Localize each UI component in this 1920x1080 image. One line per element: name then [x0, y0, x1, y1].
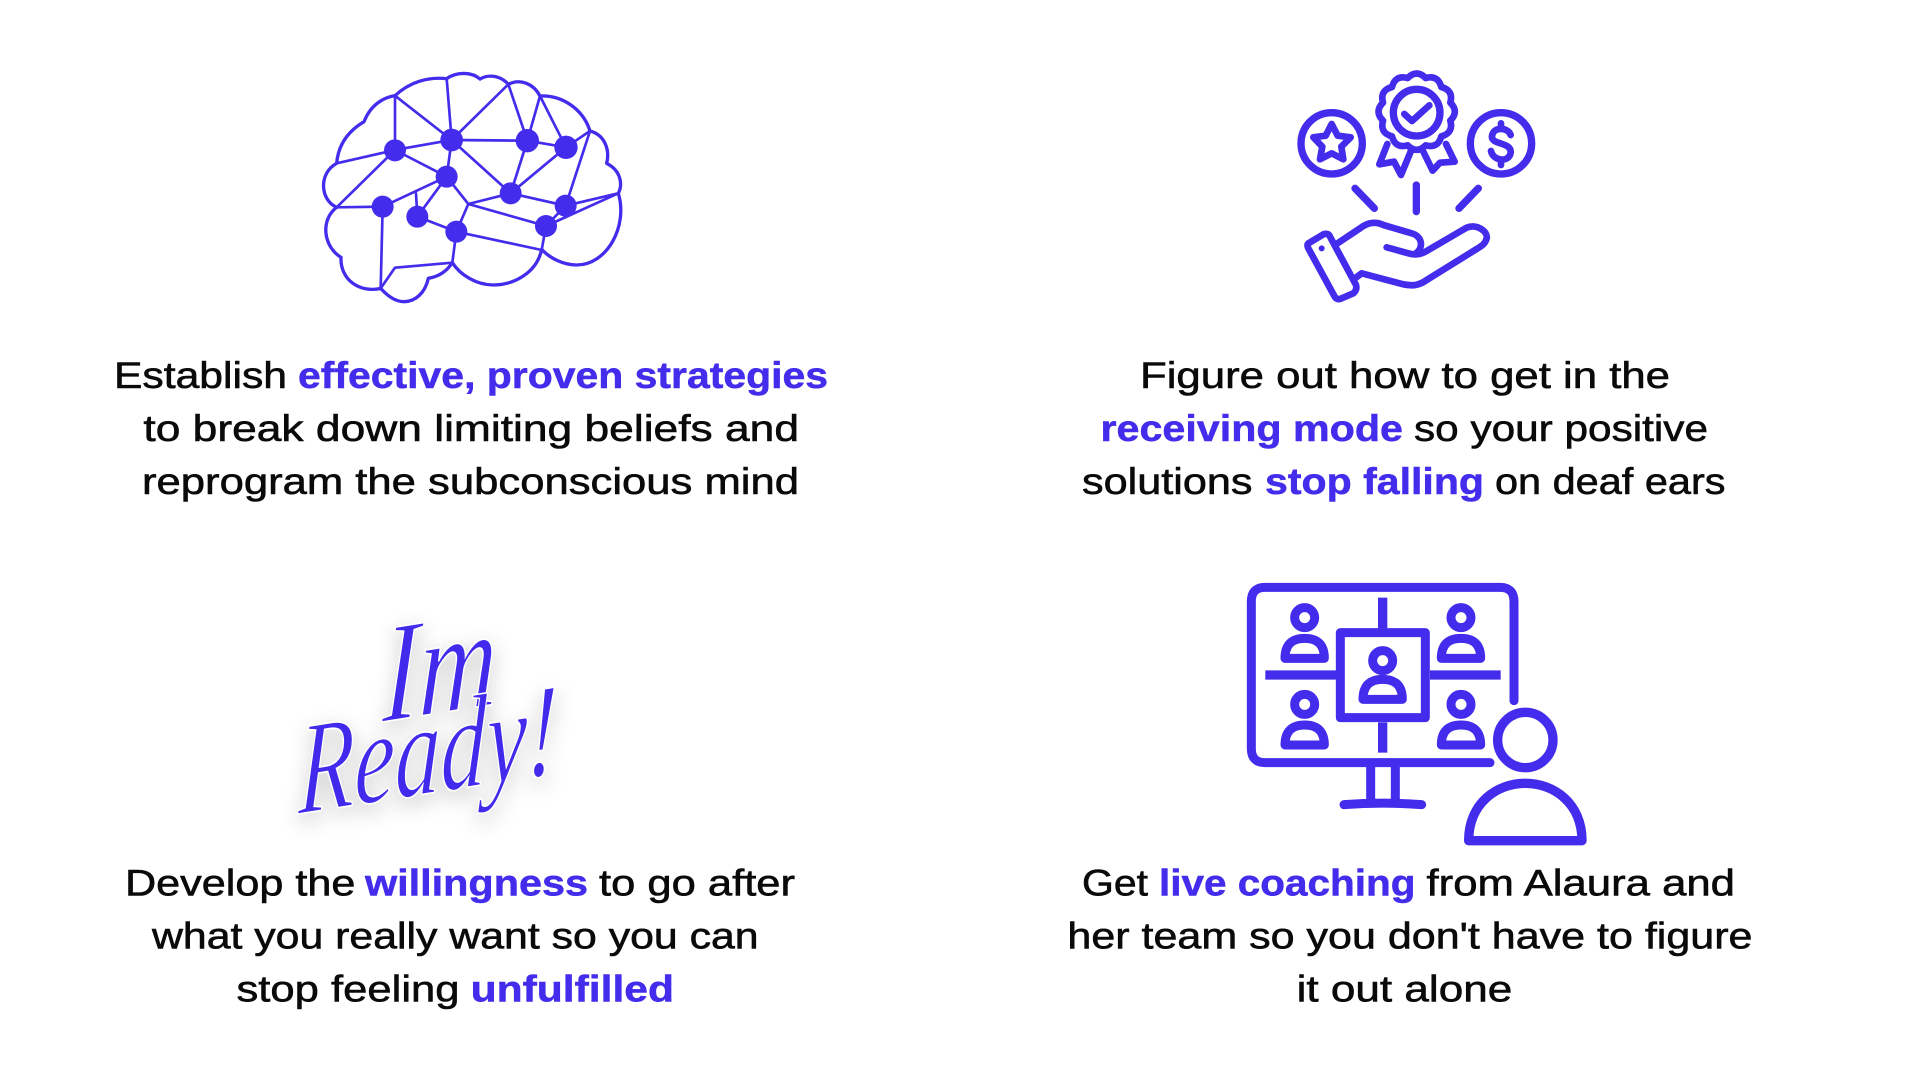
text: strategies copy: reprogram the subconscious mind [142, 461, 799, 502]
text: receiving mode copy: stop falling [1265, 461, 1484, 502]
text: strategies copy: Establish [114, 355, 287, 396]
text: receiving mode copy: so your positive [1414, 408, 1708, 449]
text: live coaching copy [1067, 862, 1752, 1010]
text: willingness copy: what you really want so you can [151, 916, 759, 956]
text: willingness copy [125, 862, 795, 1010]
text: live coaching copy: Get [1082, 862, 1149, 904]
text: strategies copy [114, 355, 828, 502]
text: receiving mode copy: on deaf ears [1495, 461, 1726, 502]
text: receiving mode copy [1082, 355, 1726, 502]
text: receiving mode copy: receiving mode [1100, 408, 1403, 449]
text: willingness copy: Develop the [125, 862, 355, 904]
icon: video call monitor with coach [1251, 587, 1582, 841]
panel: willingness [125, 577, 795, 1010]
panel: receiving mode [1082, 73, 1726, 502]
panel: live coaching [1067, 587, 1752, 1010]
icon: hand receiving awards [1301, 73, 1532, 299]
text: willingness copy: willingness [364, 862, 588, 904]
text: strategies copy: to break down limiting beliefs and [143, 408, 799, 449]
panel: strategies [114, 73, 828, 502]
text: receiving mode copy: solutions [1082, 461, 1252, 502]
text: willingness copy: stop feeling [236, 968, 460, 1010]
script lettering: Im Ready!: Im [381, 577, 499, 753]
script lettering: Im Ready!: Ready! [297, 656, 559, 843]
text: willingness copy: to go after [599, 862, 795, 904]
icon: network brain [324, 73, 621, 302]
script lettering: Im Ready! [297, 577, 559, 843]
text: live coaching copy: live coaching [1159, 862, 1416, 904]
text: strategies copy: effective, proven strategies [298, 355, 828, 396]
text: live coaching copy: it out alone [1297, 968, 1512, 1010]
text: live coaching copy: from Alaura and [1426, 862, 1735, 904]
text: willingness copy: unfulfilled [471, 968, 674, 1010]
text: live coaching copy: her team so you don't have to figure [1067, 916, 1752, 956]
text: receiving mode copy: Figure out how to get in the [1140, 355, 1670, 396]
